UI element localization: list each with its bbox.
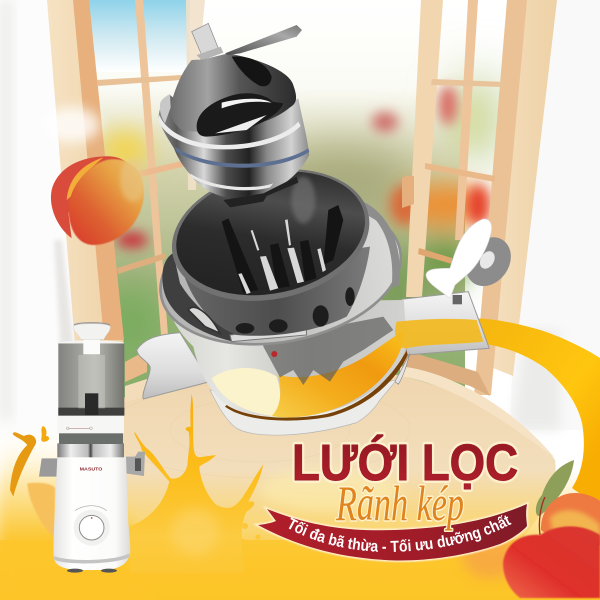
lid knob	[73, 324, 110, 339]
juice	[272, 330, 404, 417]
juice stream from spout	[403, 318, 600, 503]
icon: peach, bottom right	[503, 493, 600, 598]
wooden table	[110, 350, 556, 600]
title block	[253, 432, 530, 563]
juice splash: left	[10, 426, 55, 537]
bowl	[159, 95, 309, 198]
auger with blade	[158, 23, 309, 207]
dark strainer basket	[160, 152, 382, 336]
collar	[57, 415, 124, 433]
subtitle: ranh kep	[335, 475, 464, 531]
left spout	[137, 333, 210, 399]
side spouts	[39, 458, 58, 477]
window frame: left	[44, 0, 205, 345]
glass bowl	[167, 300, 410, 435]
control dial	[74, 506, 110, 546]
hopper	[58, 343, 124, 415]
yellow floor gradient	[0, 425, 600, 600]
title: luoi loc: LƯỚI LỌC	[292, 434, 518, 491]
ribbon banner	[258, 504, 527, 560]
juice in spout overlay	[395, 319, 483, 348]
body	[53, 457, 130, 570]
ribbon text: Tối đa bã thừa - Tối ưu dưỡng chất	[288, 514, 512, 552]
window frame: right	[402, 0, 557, 396]
subtitle: ranh kep: Rãnh kép	[335, 475, 464, 531]
subtitle: ranh kep: Rãnh kép	[335, 475, 464, 531]
white lever and grey disc	[426, 219, 520, 304]
bowl body	[167, 300, 407, 417]
cone	[170, 53, 296, 132]
right spout	[402, 292, 489, 355]
base	[210, 380, 397, 435]
translucent blades	[263, 317, 393, 385]
title: luoi loc: LƯỚI LỌC	[292, 434, 518, 491]
juice splash: crown next to blender	[129, 394, 263, 573]
brand: MASUTO	[80, 466, 102, 472]
outer rim	[148, 183, 413, 364]
white pulp	[212, 368, 280, 416]
blender machine	[39, 323, 145, 573]
chrome band	[57, 443, 124, 457]
icon: peach, top left	[51, 156, 146, 245]
juicer exploded view	[137, 23, 520, 435]
icon: peach leaf	[536, 460, 574, 516]
